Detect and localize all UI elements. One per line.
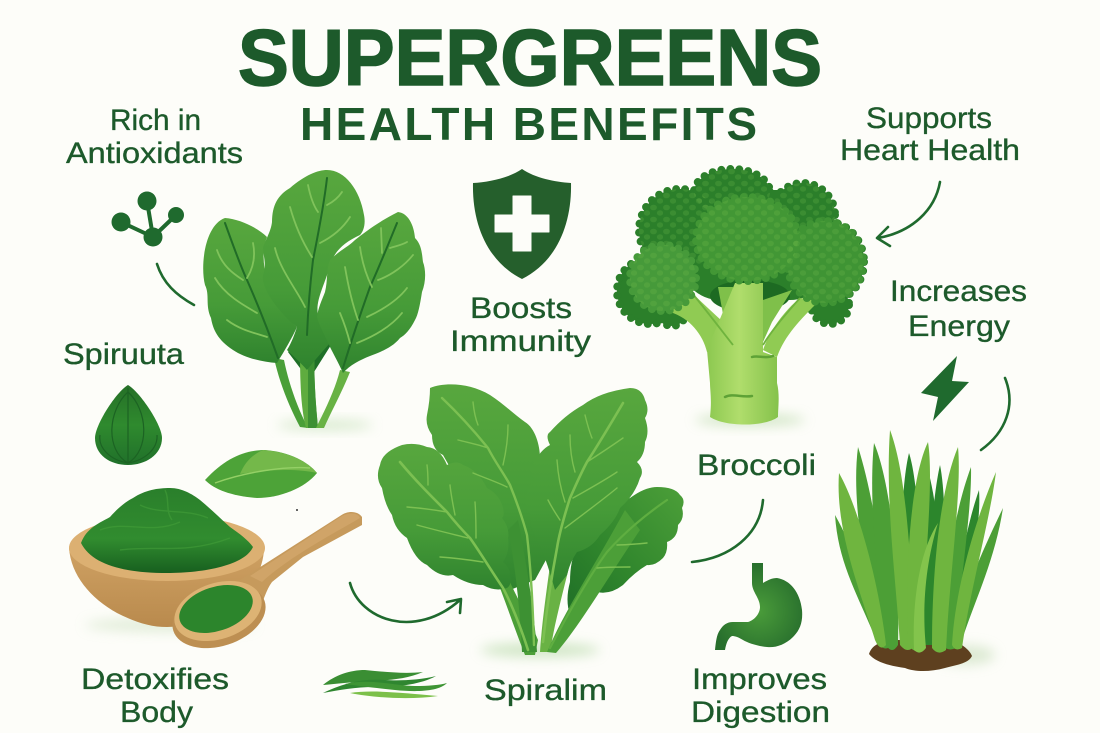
label: boosts immunity: [450, 292, 591, 358]
stem branches and trunk: [670, 293, 735, 352]
label: spiruuta: Spiruuta: [63, 338, 184, 371]
kale veins: [400, 398, 667, 650]
kale plant: [378, 384, 684, 657]
label: rich in antioxidants: Antioxidants: [66, 137, 243, 170]
label: improves digestion: [691, 663, 830, 729]
arrow: broccoli label to kale: [692, 500, 763, 562]
label: detoxifies body: Body: [120, 696, 193, 729]
right leaf: [568, 487, 684, 615]
label: rich in antioxidants: [66, 104, 243, 170]
small leaf: [205, 450, 317, 498]
label: broccoli: Broccoli: [697, 449, 816, 482]
icon: spirulina strands: [323, 670, 447, 698]
mid blades: [835, 443, 1003, 650]
title: HEALTH BENEFITS: [300, 98, 757, 150]
label: supports heart health: Heart Health: [840, 134, 1020, 167]
arrow: antioxidants to spinach: [157, 264, 194, 305]
arrow: heart health to broccoli: [877, 182, 940, 246]
wooden spoon: [164, 512, 362, 659]
back blades: [901, 453, 979, 645]
front blade: [914, 523, 938, 653]
label: improves digestion: Improves: [692, 663, 827, 696]
label: increases energy: Energy: [908, 310, 1010, 343]
tiny dot: [296, 509, 298, 511]
label: supports heart health: [840, 102, 1020, 167]
title: SUPERGREENS: [238, 13, 822, 102]
back florets: [617, 169, 864, 326]
label: increases energy: [890, 275, 1027, 343]
icon: lightning bolt: [921, 356, 969, 421]
icon: molecule: [112, 192, 184, 246]
label: boosts immunity: Boosts: [470, 292, 572, 325]
right leaf: [317, 212, 425, 373]
soil: [869, 640, 972, 671]
light blades: [839, 430, 996, 653]
spinach veins: [215, 178, 413, 368]
kale stems: [495, 510, 640, 655]
label: boosts immunity: Immunity: [450, 325, 591, 358]
upper right leaf: [525, 388, 648, 590]
arrow: curved arrow to kale: [350, 583, 461, 622]
upper left leaf: [427, 384, 547, 590]
title: [238, 13, 822, 150]
center leaf: [263, 170, 365, 370]
label: supports heart health: Supports: [866, 102, 992, 135]
bowl of powder: [69, 488, 265, 632]
label: detoxifies body: Detoxifies: [81, 663, 229, 696]
icon: leaf drop: [95, 385, 162, 465]
label: spiralim: Spiralim: [484, 674, 607, 707]
label: rich in antioxidants: Rich in: [110, 104, 201, 137]
label: detoxifies body: [81, 663, 229, 729]
front florets: [630, 197, 863, 311]
icon: shield with cross: [473, 169, 571, 279]
wheatgrass: [835, 430, 1003, 671]
spinach plant: [203, 170, 425, 430]
left leaf: [378, 444, 511, 589]
powder mound: [81, 488, 253, 573]
icon: stomach: [715, 563, 802, 650]
left leaf: [203, 218, 297, 363]
label: increases energy: Increases: [890, 275, 1027, 308]
wooden bowl: [69, 515, 265, 627]
broccoli: [617, 169, 864, 426]
label: improves digestion: Digestion: [691, 696, 830, 729]
arrow: energy to grass: [981, 378, 1009, 450]
